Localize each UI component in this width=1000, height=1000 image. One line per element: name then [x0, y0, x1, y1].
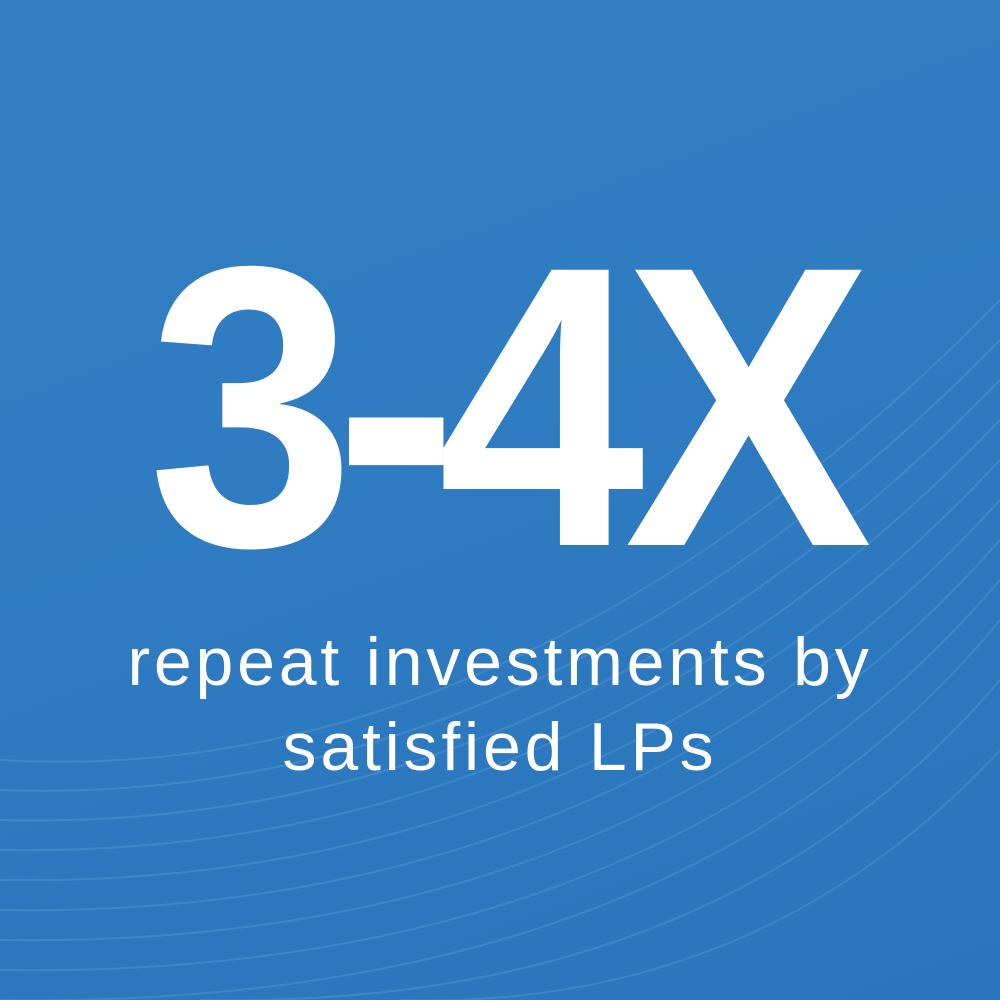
- subtitle text: repeat investments by: [127, 624, 873, 700]
- headline number: 3-4X: [148, 183, 852, 630]
- subtitle text: satisfied LPs: [283, 709, 717, 785]
- subtitle text: [127, 624, 873, 785]
